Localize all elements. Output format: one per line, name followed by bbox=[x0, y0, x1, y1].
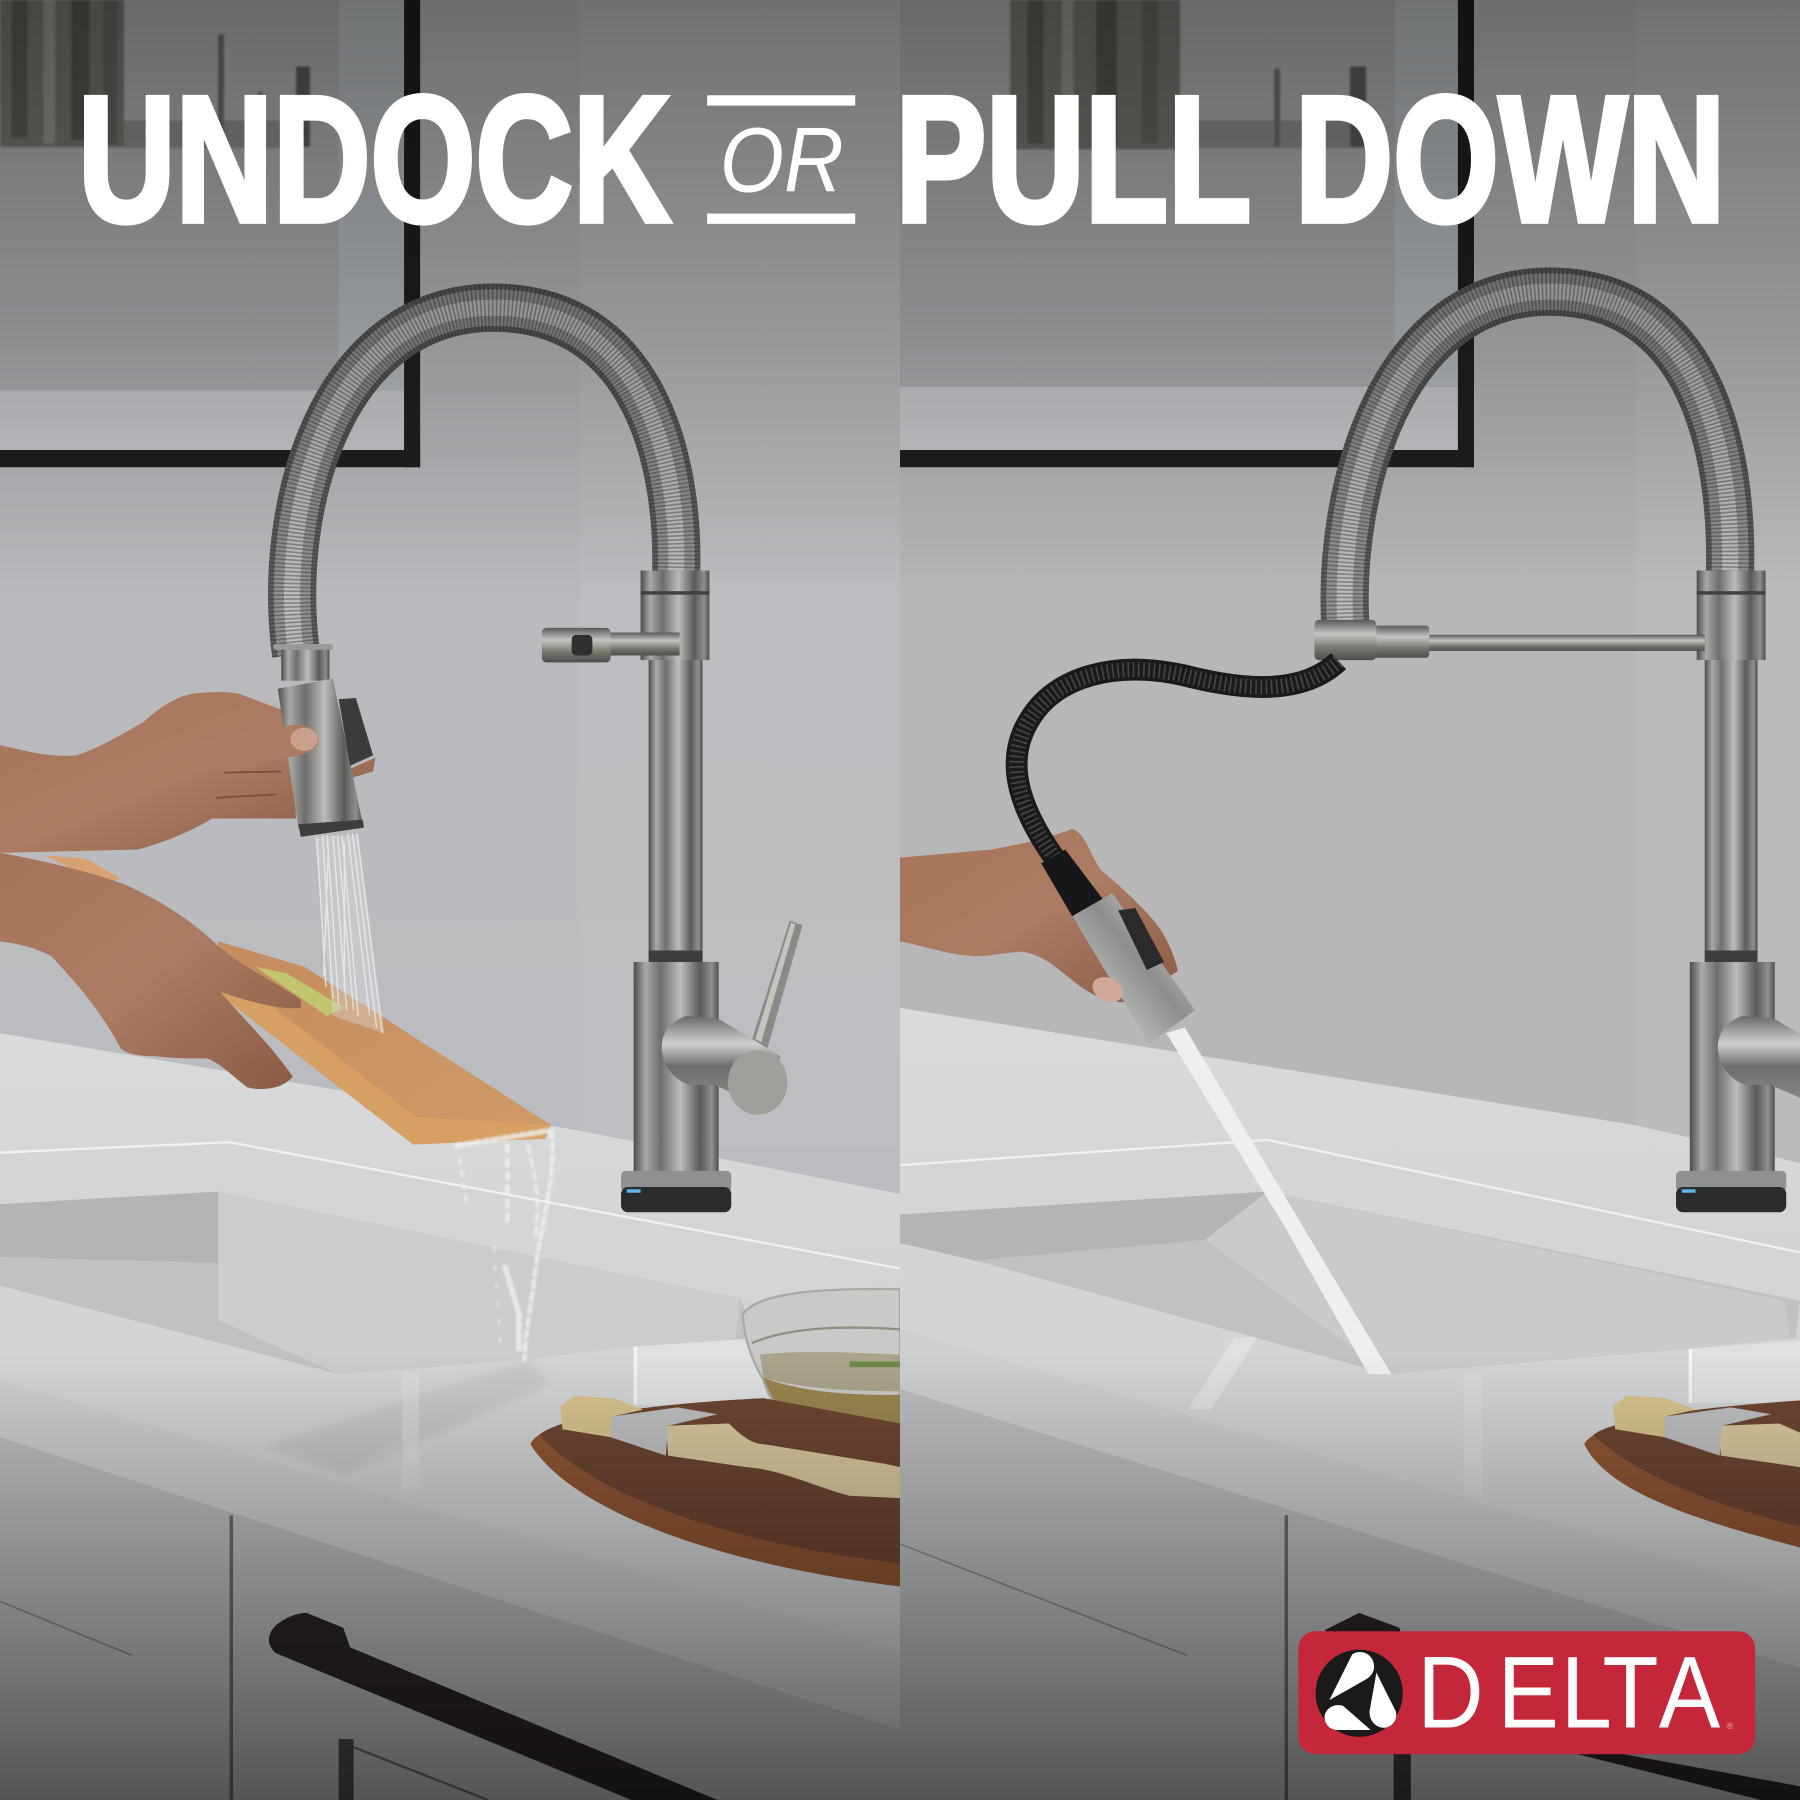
cabinet doors bbox=[900, 1389, 1800, 1800]
faucet handle knob bbox=[1718, 1016, 1800, 1098]
sink rim bbox=[900, 1138, 1800, 1254]
front countertop bbox=[280, 1339, 769, 1490]
hand holding spray head bbox=[900, 829, 1178, 1002]
sink basin bbox=[900, 1192, 1800, 1374]
dock arm with rod bbox=[1314, 620, 1705, 660]
faucet lever handle bbox=[662, 921, 802, 1115]
title: PULL bbox=[895, 59, 1251, 259]
bottom shading bbox=[0, 1355, 1800, 1800]
cutting board bbox=[44, 855, 551, 1145]
thumb on spray head bbox=[216, 724, 318, 799]
icon: delta triangle mark bbox=[1316, 1650, 1403, 1737]
title: UNDOCK bbox=[78, 59, 670, 259]
sink rim bbox=[0, 1141, 900, 1270]
front countertop bbox=[900, 1243, 1800, 1494]
drawer handle bbox=[1325, 1613, 1800, 1800]
counter front edge bbox=[0, 1380, 900, 1730]
basting brush bbox=[1613, 1396, 1800, 1467]
panel: right photo, pull-down faucet bbox=[900, 0, 1800, 1800]
faucet column bbox=[621, 571, 731, 1212]
wooden tray bbox=[1584, 1401, 1800, 1547]
countertop bbox=[900, 1008, 1800, 1668]
drawer handle bbox=[269, 1613, 717, 1800]
pull-down spray head bbox=[1041, 849, 1195, 1043]
cabinet drawers bbox=[0, 1438, 737, 1800]
faucet column bbox=[1676, 571, 1786, 1212]
water spray on board bbox=[315, 833, 385, 1033]
counter front edge bbox=[900, 1329, 1800, 1668]
framed picture bbox=[900, 0, 1474, 467]
top shading bbox=[0, 0, 1800, 597]
mixing bowl bbox=[742, 1288, 900, 1424]
delta wordmark: DELTA bbox=[1417, 1635, 1720, 1750]
framed picture bbox=[0, 0, 420, 467]
magnetic dock arm bbox=[542, 628, 680, 662]
lower hand holding board bbox=[0, 853, 301, 1089]
wall bbox=[0, 0, 900, 1263]
registered mark: ® bbox=[1727, 1721, 1734, 1731]
title connector: or: OR bbox=[720, 110, 844, 212]
wooden tray bbox=[530, 1398, 900, 1586]
basting brush bbox=[560, 1396, 900, 1498]
braided hose bbox=[1017, 661, 1339, 859]
water stream bbox=[1166, 1027, 1391, 1374]
countertop bbox=[0, 1033, 900, 1800]
upper hand holding spray head bbox=[0, 692, 375, 853]
faucet gooseneck bbox=[292, 308, 676, 654]
title bbox=[78, 59, 1725, 259]
panel: left photo, undocked faucet bbox=[0, 0, 900, 1800]
wall bbox=[900, 0, 1800, 1263]
water dripping off board bbox=[457, 1131, 553, 1359]
faucet gooseneck bbox=[1345, 292, 1730, 626]
spray head bbox=[273, 644, 373, 837]
sink basin bbox=[0, 1192, 758, 1374]
delta logo badge bbox=[1298, 1631, 1755, 1754]
